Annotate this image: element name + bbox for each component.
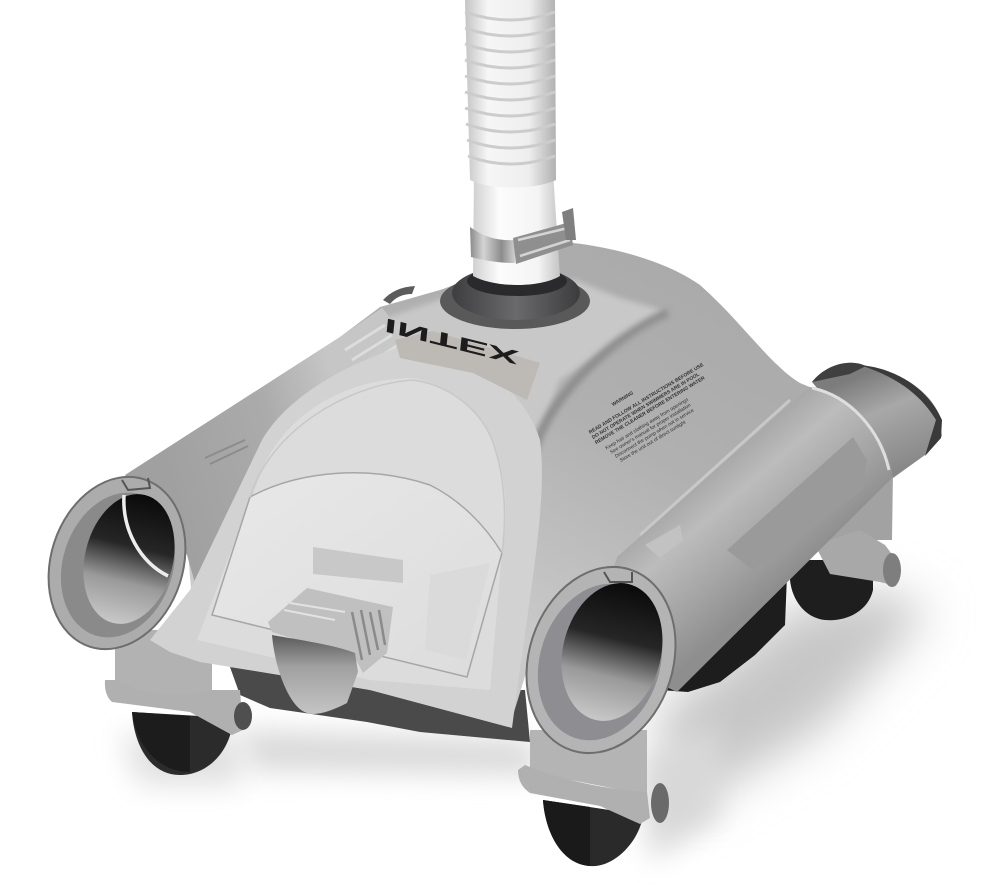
INTEX label [383, 313, 540, 400]
warning text block [582, 352, 726, 470]
inner housing panel [197, 378, 506, 690]
left tube [125, 286, 415, 590]
warning text block: Keep hair and clothing away from openings [604, 397, 690, 451]
center nozzle [268, 547, 403, 714]
hose clamp [470, 208, 576, 264]
white connector [473, 172, 560, 285]
INTEX label: INTEX [383, 313, 520, 368]
warning text block: DO NOT OPERATE WHEN SWIMMERS ARE IN POOL [591, 372, 701, 441]
dome shaded band [534, 312, 668, 450]
right mouth [503, 547, 699, 773]
warning text block: READ AND FOLLOW ALL INSTRUCTIONS BEFORE USE [588, 362, 705, 436]
outer light housing [150, 345, 542, 728]
corrugated hose [465, 0, 556, 188]
warning text block: WARNING [611, 390, 635, 408]
threaded hose collar [440, 266, 590, 329]
right tube barrel [590, 387, 893, 692]
warning text block: REMOVE THE CLEANER BEFORE ENTERING WATER [594, 375, 707, 446]
upper dome highlight near collar [345, 280, 668, 445]
main dome body [125, 243, 812, 725]
right tube [812, 363, 942, 478]
left front wheel and bracket [105, 630, 252, 775]
dark underbody [230, 667, 530, 742]
front lid [212, 380, 505, 677]
right front wheel and bracket [518, 730, 669, 866]
left mouth [27, 459, 207, 667]
warning text block: Store the unit out of direct sunlight [619, 419, 687, 464]
warning text block: Disconnect the pump when not in service [614, 408, 695, 460]
warning text block: See owner's manual for proper installation [609, 402, 692, 456]
back right wheel [790, 470, 901, 620]
dark right undercarriage [660, 575, 787, 692]
rear end cap [812, 363, 942, 478]
floor shadow [120, 590, 930, 860]
